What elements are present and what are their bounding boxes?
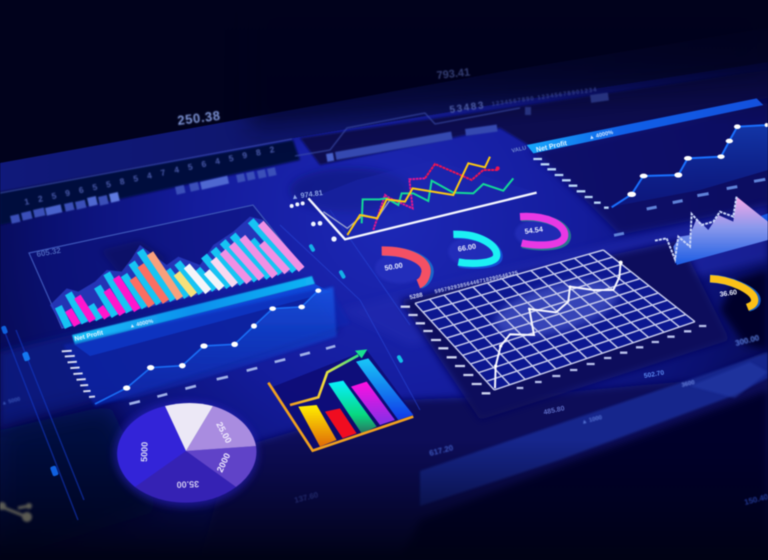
slice: blue [117,406,186,487]
label: 300.00 [734,333,761,348]
header digits right: 1234567890 12345678901234 [491,87,598,108]
header percent: ▲ 4000% [588,130,614,141]
lower right map labels [0,333,768,522]
data dots [627,123,768,197]
line [95,291,318,404]
multi line chart [290,157,537,242]
value label: 502.70 [643,369,665,380]
label: 617.20 [428,443,455,458]
panel outline [29,205,303,328]
red gauge [382,251,429,284]
cyan gauge: 66.00 [457,242,477,254]
bars [58,221,302,327]
grid plane [415,250,695,390]
cyan gauge [453,234,499,265]
white trend line [495,263,621,388]
label: 137.60 [293,490,320,505]
header value 793.41: 793.41 [436,67,471,82]
magenta bar [351,382,395,425]
x ticks [614,179,765,235]
header band [527,98,763,153]
line [612,125,768,207]
yellow gauge [710,279,757,308]
thin header rule [0,108,520,193]
small label: VALU [511,145,527,155]
axes [268,383,413,451]
lower band [75,284,330,356]
square cell strip left [10,167,277,224]
trend dots [494,261,623,368]
pie label 25.00: 25.00 [214,420,234,445]
slice: dark violet [135,451,236,503]
magenta line [373,178,425,230]
yellow gauge: 36.60 [719,289,738,299]
data dots [123,288,321,391]
label: ▲ 1000 [581,415,603,426]
bottom tick labels [517,326,706,388]
left tick labels [401,307,490,393]
pie label 2000: 2000 [215,451,232,474]
mountain area chart [655,196,768,265]
panel value label: 605.32 [36,246,62,259]
top long number row: 59579293856446718290546325 [434,270,519,295]
label: 3600 [681,380,696,389]
donut gauges [375,216,567,284]
x axis ticks [129,346,335,404]
legend text: Net Profit [74,329,105,343]
slice: violet [186,446,256,487]
red gauge: 50.00 [384,261,403,273]
line chart lower left [62,287,350,407]
slice: white [165,403,213,451]
blue bar [356,358,413,420]
small network icon [0,502,32,522]
trend arrow [290,355,358,405]
area fill [607,125,768,208]
arrow head [355,349,367,358]
bar chart glow silhouette [50,217,302,328]
plot fill [310,160,537,239]
panel backing [63,287,350,407]
grid line chart [401,250,706,417]
white axes [308,193,537,239]
panel: bar chart [29,205,330,356]
yellow line [347,157,490,235]
magenta gauge [520,216,567,246]
magenta gauge: 54.54 [524,224,544,236]
pie label 5000: 5000 [139,442,150,462]
label: ▲ 5000 [1,396,21,407]
red end dot [496,166,500,170]
pie glow [114,401,258,507]
orange framed bar chart [268,349,415,452]
pie chart [114,401,258,507]
gray line [323,200,390,228]
area fill [95,287,337,404]
legend percent: ▲ 4000% [129,319,154,330]
dark backing [273,350,415,452]
outline peaks [655,196,737,259]
header text: Net Profit [536,140,568,154]
grid lines [415,250,695,390]
digit strip: 1259655854745645982 [23,142,284,207]
axis dots [290,201,337,242]
header value 53483: 53483 [449,100,486,116]
cyan bar [328,381,377,433]
top number row: 5288 [409,292,424,301]
green line [362,178,513,223]
yellow bar [298,405,337,447]
slice: light violet [186,406,256,451]
pink area [673,197,768,265]
square cell strip right [326,92,609,162]
y axis ticks [62,349,95,399]
red bar [325,408,357,438]
pie label 35.00: 35.00 [176,479,199,490]
chart value: ▲ 974.81 [291,188,323,201]
y ticks [533,159,609,208]
panel: top right line chart [511,98,768,235]
header value 250.38: 250.38 [177,108,221,128]
grid glow [489,269,624,347]
blue plinth [675,213,768,263]
gauge halos [375,219,562,283]
header labels and number strip [0,67,609,224]
red line [425,164,498,180]
value label lower: 485.80 [543,405,565,417]
blue legend band [72,276,315,345]
